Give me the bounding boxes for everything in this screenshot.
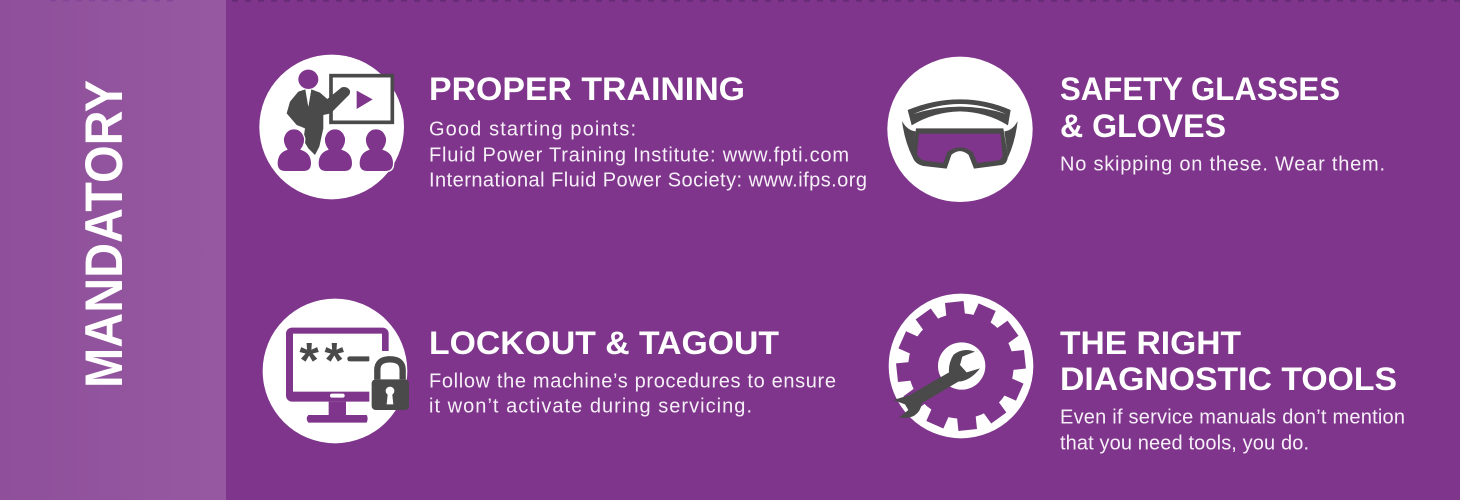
- text block: training sources: [429, 118, 867, 192]
- heading: the right diagnostic tools: [1060, 325, 1397, 397]
- text block: training sources: Fluid Power Training Institute: www.fpti.com: [429, 144, 849, 166]
- text block: training sources: International Fluid Power Society: www.ifps.org: [429, 170, 867, 192]
- panel: safety glasses and gloves: [887, 57, 1385, 202]
- heading: mandatory: MANDATORY: [75, 80, 134, 388]
- text block: training sources: Good starting points:: [429, 118, 636, 140]
- text block: lockout description: it won’t activate during servicing.: [429, 396, 752, 418]
- icon: monitor with padlock: **: [299, 332, 345, 388]
- heading: the right diagnostic tools: DIAGNOSTIC TOOLS: [1060, 361, 1397, 397]
- panel: proper training: [259, 55, 867, 199]
- text block: tools description: [1060, 406, 1405, 454]
- text block: tools description: that you need tools, you do.: [1060, 432, 1309, 454]
- panel: mandatory sidebar: [0, 0, 226, 500]
- heading: proper training: PROPER TRAINING: [429, 71, 745, 107]
- heading: the right diagnostic tools: THE RIGHT: [1060, 325, 1241, 361]
- text block: lockout description: Follow the machine’s procedures to ensure: [429, 370, 836, 392]
- icon: gear and wrench: [889, 294, 1033, 438]
- text block: tools description: Even if service manuals don’t mention: [1060, 406, 1405, 428]
- icon: presenter and audience: [259, 55, 404, 199]
- icon: monitor with padlock: [263, 299, 409, 443]
- icon: safety goggles: [887, 57, 1033, 202]
- heading: lockout and tagout: LOCKOUT & TAGOUT: [429, 325, 779, 361]
- heading: safety glasses and gloves: SAFETY GLASSES: [1060, 71, 1340, 107]
- text block: lockout description: [429, 370, 836, 418]
- heading: safety glasses and gloves: & GLOVES: [1060, 108, 1226, 144]
- heading: safety glasses and gloves: [1060, 71, 1340, 144]
- panel: lockout and tagout: [263, 299, 836, 443]
- text block: wear them: No skipping on these. Wear them.: [1060, 154, 1385, 176]
- panel: right diagnostic tools: [889, 294, 1405, 454]
